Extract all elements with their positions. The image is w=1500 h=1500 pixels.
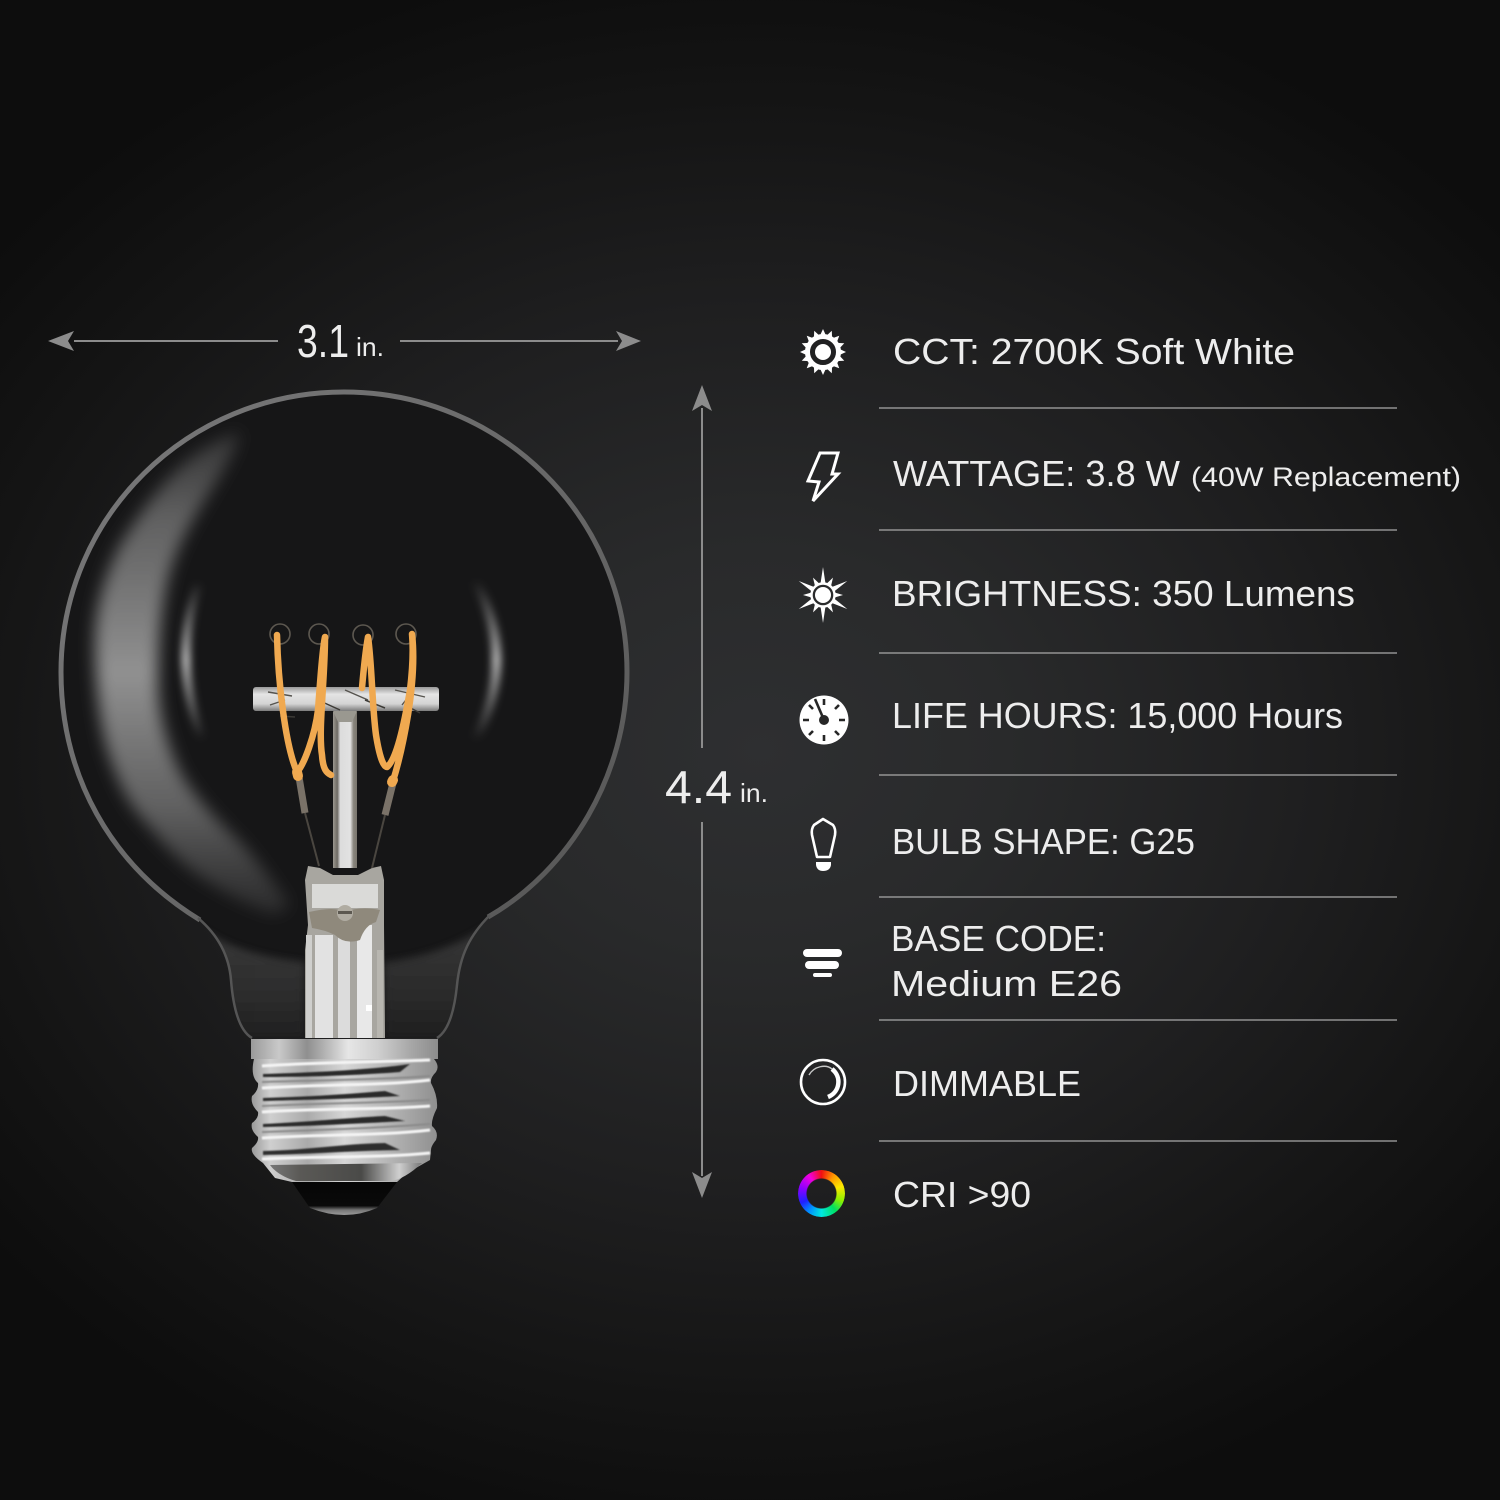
width dimension: 3.1 in.: in. — [356, 332, 384, 362]
width dimension: 3.1 in.: 3.1 — [297, 315, 349, 367]
spec: brightness: BRIGHTNESS: 350 Lumens — [892, 573, 1355, 614]
crossbar support — [253, 687, 439, 722]
icon: bulb outline — [812, 819, 835, 871]
icon: clock — [800, 696, 848, 744]
spec: bulb shape: BULB SHAPE: G25 — [892, 821, 1195, 862]
icon: dimmer ring — [801, 1060, 845, 1104]
spec: bulb shape — [812, 819, 1195, 871]
bulb illustration — [61, 392, 627, 1215]
icon: stacked base — [803, 949, 842, 977]
height dimension: 4.4 in.: in. — [740, 778, 768, 808]
glass globe — [61, 392, 627, 1040]
spec: dimmable — [801, 1060, 1081, 1104]
spec: CCT: CCT: 2700K Soft White — [893, 331, 1295, 372]
spec: dimmable: DIMMABLE — [893, 1063, 1081, 1104]
icon: bright sun — [798, 567, 848, 623]
spec: base code — [803, 918, 1122, 1004]
spec: wattage: (40W Replacement) — [1191, 462, 1461, 492]
height dimension: 4.4 in.: 4.4 — [665, 761, 732, 813]
support wires — [270, 624, 420, 868]
spec: life hours — [800, 695, 1343, 744]
spec: CCT — [800, 329, 1295, 375]
icon: gear sun — [800, 329, 846, 375]
icon: colour wheel — [798, 1170, 845, 1217]
spec: CRI label: CRI >90 — [893, 1174, 1031, 1215]
base contact tip — [292, 1182, 397, 1215]
spec: brightness — [798, 567, 1355, 623]
spec: wattage — [808, 453, 1461, 501]
spec: life hours: LIFE HOURS: 15,000 Hours — [892, 695, 1343, 736]
screw base — [251, 1039, 438, 1182]
spec: base code: Medium E26 — [891, 963, 1122, 1004]
icon: lightning bolt — [808, 453, 838, 501]
spec: wattage: WATTAGE: 3.8 W — [893, 453, 1180, 494]
spec: base code: BASE CODE: — [891, 918, 1106, 959]
glass stem and pinch — [305, 712, 385, 1038]
height dimension: 4.4 in. — [665, 385, 768, 1198]
spec separators — [879, 408, 1397, 1141]
width dimension: 3.1 in. — [48, 315, 641, 367]
LED filaments — [277, 634, 413, 782]
